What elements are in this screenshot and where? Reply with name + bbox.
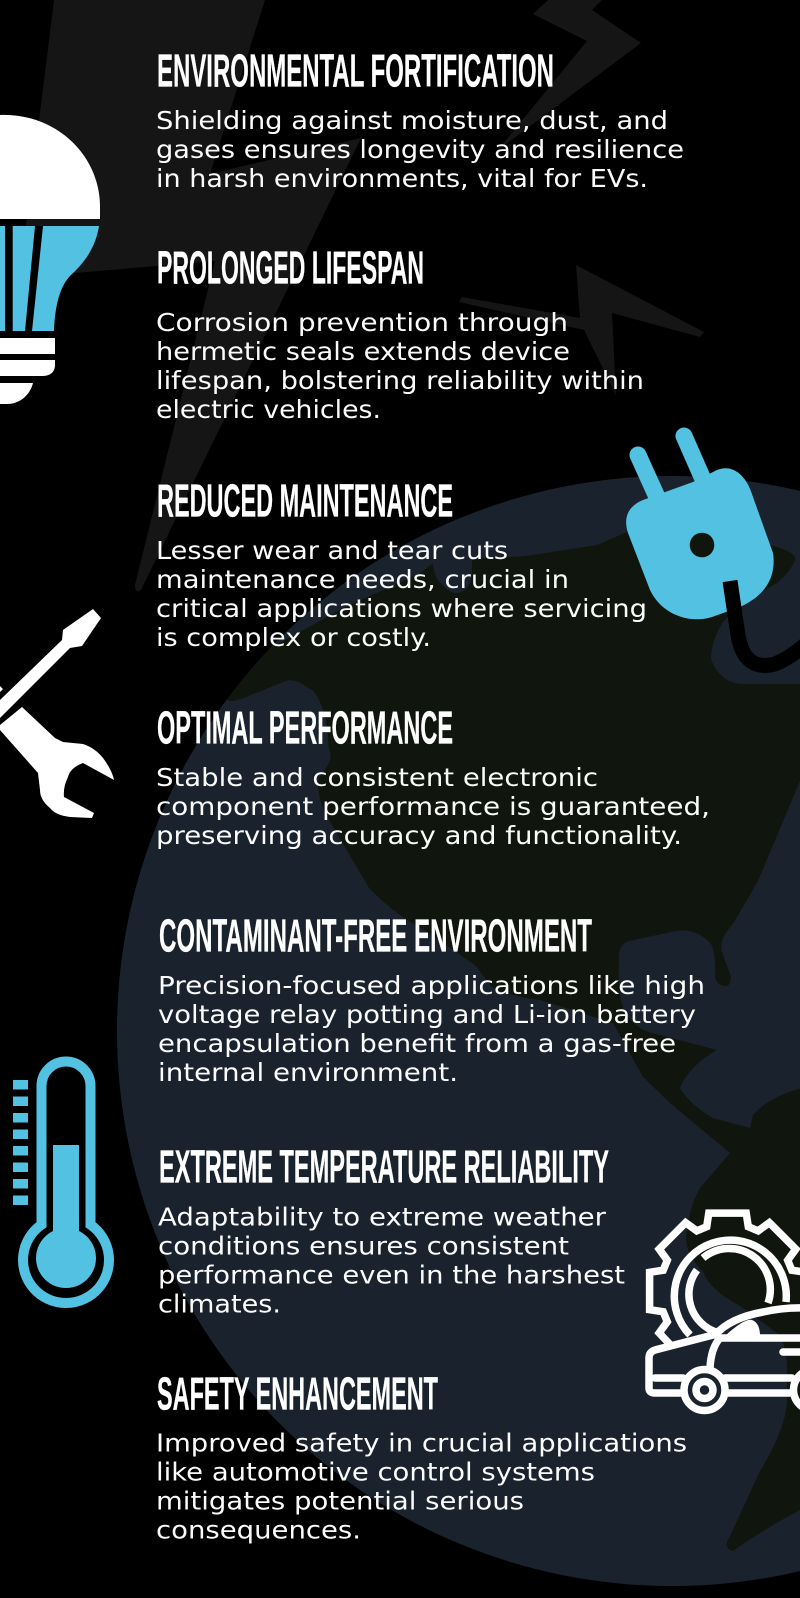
- screwdriver: [0, 609, 101, 718]
- body text: hermetic seals extends device: [156, 337, 570, 366]
- bulb dome: [0, 115, 100, 219]
- bulb lower glass: [0, 226, 99, 331]
- body text: conditions ensures consistent: [158, 1232, 569, 1260]
- panel: extreme temperature reliability: [158, 1140, 625, 1318]
- bulb filaments: [5, 226, 43, 331]
- plug body: [626, 468, 774, 619]
- body text: in harsh environments, vital for EVs.: [156, 164, 648, 193]
- body text: electric vehicles.: [156, 395, 381, 424]
- body text: component performance is guaranteed,: [156, 792, 710, 821]
- body text: Shielding against moisture, dust, and: [156, 106, 668, 135]
- body text: [156, 106, 684, 193]
- body text: lifespan, bolstering reliability within: [156, 366, 644, 395]
- right lightning bolt: [459, 265, 704, 395]
- body text: internal environment.: [158, 1058, 458, 1087]
- panel: safety enhancement: [156, 1368, 687, 1544]
- body text: Precision-focused applications like high: [158, 971, 705, 1000]
- icon: thermometer: [13, 1062, 109, 1303]
- body text: [158, 971, 705, 1087]
- thermometer outline: [23, 1062, 109, 1303]
- gear rings: [674, 1240, 786, 1335]
- body text: preserving accuracy and functionality.: [156, 821, 682, 850]
- body text: [156, 763, 710, 850]
- body text: critical applications where servicing: [156, 594, 647, 623]
- upper lightning bolt: [498, 0, 641, 150]
- heading: SAFETY ENHANCEMENT: [157, 1368, 438, 1420]
- plug hole: [690, 533, 714, 557]
- globe land: [214, 520, 800, 1551]
- body text: Improved safety in crucial applications: [156, 1428, 687, 1458]
- plug cord: [730, 581, 800, 665]
- thermometer liquid: [36, 1145, 96, 1288]
- body text: Corrosion prevention through: [156, 308, 568, 337]
- bulb base: [0, 338, 55, 404]
- body text: maintenance needs, crucial in: [156, 565, 569, 594]
- body text: consequences.: [156, 1516, 361, 1544]
- icon: power plug: [626, 436, 800, 665]
- panel: reduced maintenance: [156, 474, 647, 652]
- body text: [158, 1202, 625, 1318]
- large lightning bolt: [20, 0, 361, 591]
- car window: [726, 1320, 760, 1336]
- body text: climates.: [158, 1290, 281, 1318]
- car body: [649, 1308, 800, 1393]
- icon: wrench and screwdriver: [0, 609, 114, 818]
- body text: like automotive control systems: [156, 1458, 595, 1486]
- body text: voltage relay potting and Li-ion battery: [158, 1000, 696, 1029]
- car wheels: [684, 1370, 800, 1410]
- panel: prolonged lifespan: [156, 242, 644, 424]
- thermometer ticks: [13, 1080, 28, 1205]
- icon: gear and car: [649, 1213, 800, 1410]
- globe: [117, 476, 800, 1586]
- body text: is complex or costly.: [156, 623, 431, 652]
- body text: encapsulation benefit from a gas-free: [158, 1029, 676, 1058]
- icon: light bulb: [0, 115, 100, 404]
- heading: REDUCED MAINTENANCE: [157, 474, 453, 526]
- body text: Lesser wear and tear cuts: [156, 536, 508, 565]
- body text: mitigates potential serious: [156, 1486, 524, 1516]
- gear outline: [650, 1213, 800, 1345]
- wrench: [0, 707, 114, 818]
- body text: [156, 1428, 687, 1544]
- body text: Stable and consistent electronic: [156, 763, 598, 792]
- panel: prolonged lifespan: PROLONGED LIFESPAN: [157, 242, 424, 294]
- body text: [156, 536, 647, 652]
- panel: contaminant-free environment: [158, 910, 705, 1087]
- plug prongs: [638, 436, 702, 497]
- body text: gases ensures longevity and resilience: [156, 135, 684, 164]
- panel: optimal performance: [156, 702, 710, 850]
- body text: [156, 308, 644, 424]
- body text: performance even in the harshest: [158, 1260, 625, 1290]
- heading: OPTIMAL PERFORMANCE: [157, 702, 453, 754]
- body text: Adaptability to extreme weather: [158, 1202, 607, 1232]
- panel: environmental fortification: [156, 44, 684, 193]
- globe ocean: [117, 476, 800, 1586]
